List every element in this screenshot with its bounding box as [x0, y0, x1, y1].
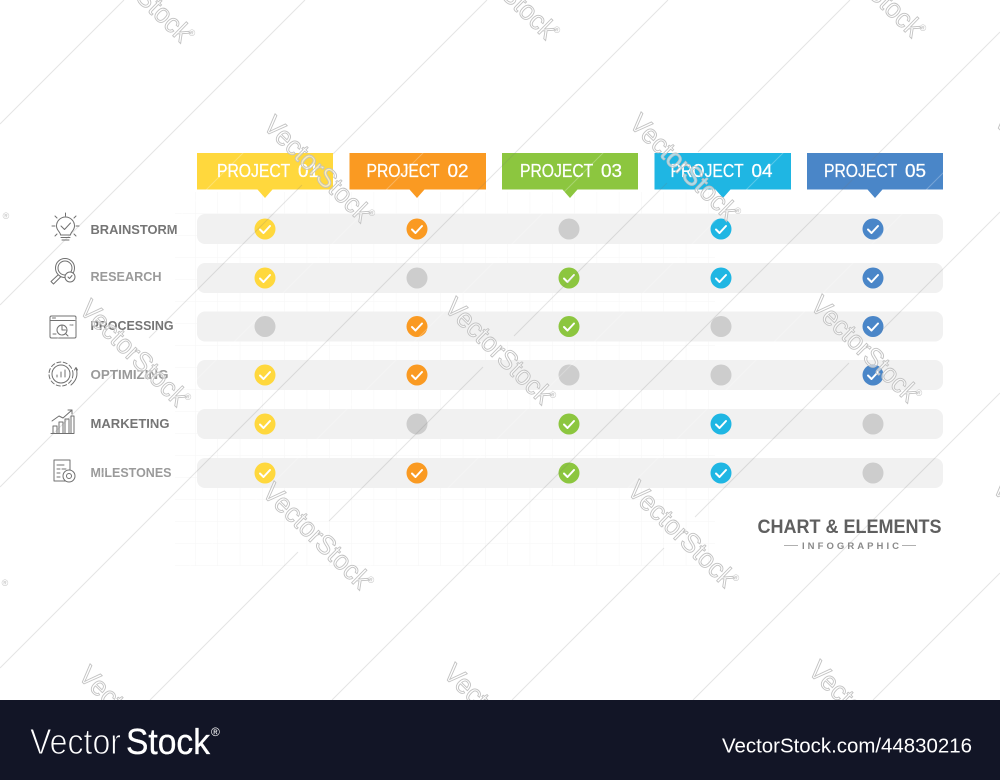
footer logo: Stock: [126, 721, 211, 762]
subtitle: infographic: INFOGRAPHIC: [802, 541, 899, 552]
header: project 02: PROJECT: [366, 161, 440, 181]
watermarks: VectorStock: [624, 108, 744, 226]
watermarks: ®: [2, 578, 9, 588]
header: project 03: PROJECT: [520, 161, 593, 181]
status: project 03 no: [558, 218, 580, 240]
status: project 03 yes: [558, 268, 580, 288]
header: project 05: PROJECT: [824, 161, 897, 181]
watermarks: ®: [916, 388, 923, 398]
status: project 02 yes: [406, 316, 428, 337]
watermarks: ®: [369, 208, 376, 218]
icon: rising bar chart: [51, 410, 74, 434]
footer bar: [0, 700, 1000, 780]
panel: project headers: [197, 153, 943, 198]
header: project 02: 02: [448, 161, 468, 181]
header: project 05: 05: [905, 161, 926, 181]
header: project 01: 01: [298, 161, 319, 181]
label: milestones: MILESTONES: [90, 465, 172, 480]
status: project 02 yes: [406, 364, 428, 386]
icon: lightbulb with check: [52, 213, 79, 240]
watermarks: VectorStock: [439, 292, 559, 410]
status: project 05 yes: [862, 364, 884, 386]
watermarks: VectorStock: [257, 477, 377, 595]
status: project 02 no: [406, 268, 428, 288]
watermarks: ®: [550, 390, 557, 400]
title: chart and elements: CHART & ELEMENTS: [758, 517, 942, 538]
status: project 04 yes: [710, 218, 732, 240]
watermarks: ®: [3, 211, 10, 221]
footer registered mark: ®: [211, 725, 220, 739]
status: project 05 yes: [862, 316, 884, 337]
status: project 05 yes: [862, 218, 884, 240]
status: project 03 yes: [558, 316, 580, 337]
icon: checklist with target: [54, 460, 75, 482]
header: project 01: [197, 153, 333, 198]
status: project 03 yes: [558, 462, 580, 484]
watermarks: VectorStock: [803, 655, 923, 773]
header: project 01: PROJECT: [217, 161, 290, 181]
status: project 02 yes: [406, 218, 428, 240]
status: project 05 no: [862, 462, 884, 484]
status: project 04 yes: [710, 462, 732, 484]
status: project 02 yes: [406, 462, 428, 484]
watermarks: VectorStock: [258, 110, 378, 228]
footer image id: VectorStock.com/44830216: [722, 736, 972, 758]
header: project 03: [502, 153, 638, 198]
watermarks: VectorStock: [74, 294, 194, 412]
watermarks: ®: [554, 25, 561, 35]
status: project 01 yes: [254, 218, 276, 240]
status: project 05 no: [862, 414, 884, 434]
title: chart and elements: [758, 517, 942, 552]
status: project 01 yes: [254, 414, 276, 434]
status: project 01 no: [254, 316, 276, 337]
label: processing: PROCESSING: [90, 318, 174, 333]
row: milestones: [197, 458, 943, 488]
status: project 05 yes: [862, 268, 884, 288]
watermarks: ®: [368, 575, 375, 585]
label: marketing: MARKETING: [90, 416, 170, 431]
watermarks: VectorStock: [438, 658, 558, 776]
row: processing: [197, 312, 943, 342]
watermarks: ®: [920, 23, 927, 33]
watermarks: ®: [185, 392, 192, 402]
header: project 04: PROJECT: [670, 161, 744, 181]
watermarks: ®: [735, 206, 742, 216]
icon: magnifier with check: [51, 258, 75, 284]
footer logo: Vector: [30, 721, 121, 762]
watermarks: VectorStock: [805, 290, 925, 408]
row: marketing: [197, 409, 943, 439]
header: project 02: [350, 153, 486, 198]
row: brainstorm: [197, 214, 943, 244]
header: project 04: [654, 153, 791, 198]
watermarks: ®: [189, 28, 196, 38]
icon: gear with chart: [49, 362, 78, 386]
status: project 03 no: [558, 364, 580, 386]
watermarks: ®: [733, 573, 740, 583]
label: brainstorm: BRAINSTORM: [90, 222, 178, 237]
header: project 03: 03: [601, 161, 622, 181]
status: project 01 yes: [254, 462, 276, 484]
status: project 04 no: [710, 364, 732, 386]
status: project 04 yes: [710, 268, 732, 288]
label: research: RESEARCH: [90, 269, 162, 284]
status: project 01 yes: [254, 364, 276, 386]
status: project 02 no: [406, 414, 428, 434]
row: research: [197, 263, 943, 293]
label: optimizing: OPTIMIZING: [90, 367, 168, 382]
icon: browser window with chart: [50, 316, 76, 338]
row: optimizing: [197, 360, 943, 390]
status: project 04 yes: [710, 414, 732, 434]
status: project 03 yes: [558, 414, 580, 434]
watermarks: VectorStock: [622, 475, 742, 593]
watermarks: VectorStock: [73, 660, 193, 778]
header: project 04: 04: [752, 161, 772, 181]
header: project 05: [807, 153, 943, 198]
status: project 01 yes: [254, 268, 276, 288]
status: project 04 no: [710, 316, 732, 337]
